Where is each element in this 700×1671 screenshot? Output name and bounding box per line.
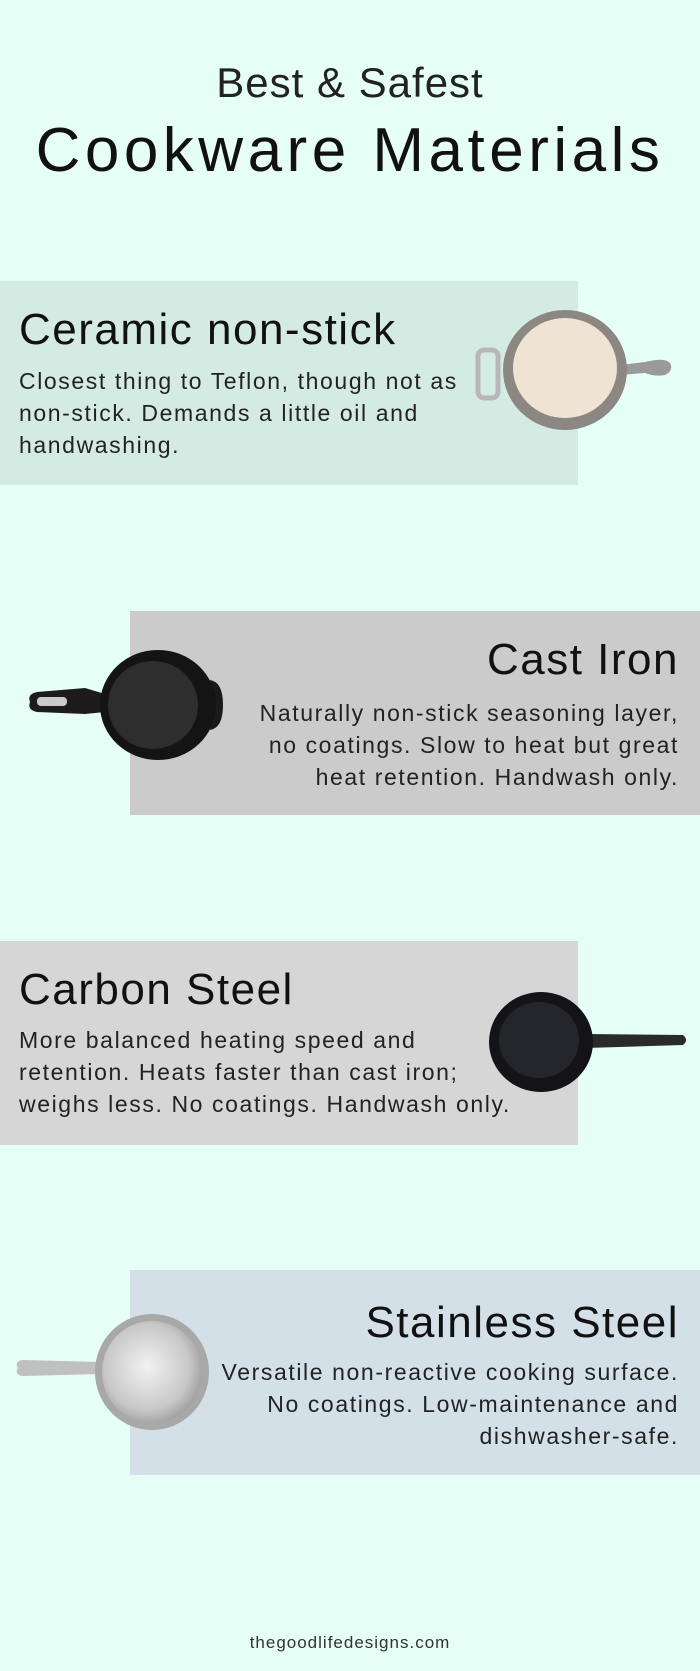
text: cast iron: Naturally non-stick seasoning layer,	[260, 700, 679, 726]
text: ceramic: Closest thing to Teflon, though not as	[19, 368, 458, 394]
icon: ceramic pan	[476, 310, 672, 430]
panel: stainless steel	[130, 1270, 700, 1475]
text: carbon steel: weighs less. No coatings. Handwash only.	[19, 1091, 511, 1117]
heading: ceramic: Ceramic non-stick	[19, 305, 397, 354]
text: cast iron	[260, 700, 679, 790]
text: cast iron: heat retention. Handwash only.	[316, 764, 679, 790]
text: carbon steel	[19, 1027, 511, 1117]
text: ceramic: handwashing.	[19, 432, 180, 458]
panel: cast iron	[130, 611, 700, 815]
text: stainless: dishwasher-safe.	[480, 1423, 679, 1449]
title: Best & Safest	[216, 59, 484, 106]
text: stainless: Versatile non-reactive cooking surface.	[222, 1359, 679, 1385]
panel: carbon steel	[0, 941, 578, 1145]
heading: cast iron: Cast Iron	[487, 635, 679, 684]
title: Cookware Materials	[36, 116, 664, 185]
title	[36, 59, 664, 185]
heading: stainless: Stainless Steel	[365, 1298, 679, 1347]
panel: ceramic non-stick	[0, 281, 578, 485]
text: ceramic	[19, 368, 458, 458]
icon: carbon steel pan	[489, 992, 686, 1092]
heading: carbon steel: Carbon Steel	[19, 965, 294, 1014]
icon: cast iron pan	[29, 650, 223, 760]
text: ceramic: non-stick. Demands a little oil and	[19, 400, 419, 426]
text: stainless	[222, 1359, 679, 1449]
footer: thegoodlifedesigns.com	[250, 1633, 450, 1652]
text: carbon steel: retention. Heats faster than cast iron;	[19, 1059, 459, 1085]
text: carbon steel: More balanced heating speed and	[19, 1027, 416, 1053]
text: cast iron: no coatings. Slow to heat but great	[269, 732, 679, 758]
text: stainless: No coatings. Low-maintenance and	[267, 1391, 679, 1417]
icon: stainless pan	[16, 1314, 209, 1430]
